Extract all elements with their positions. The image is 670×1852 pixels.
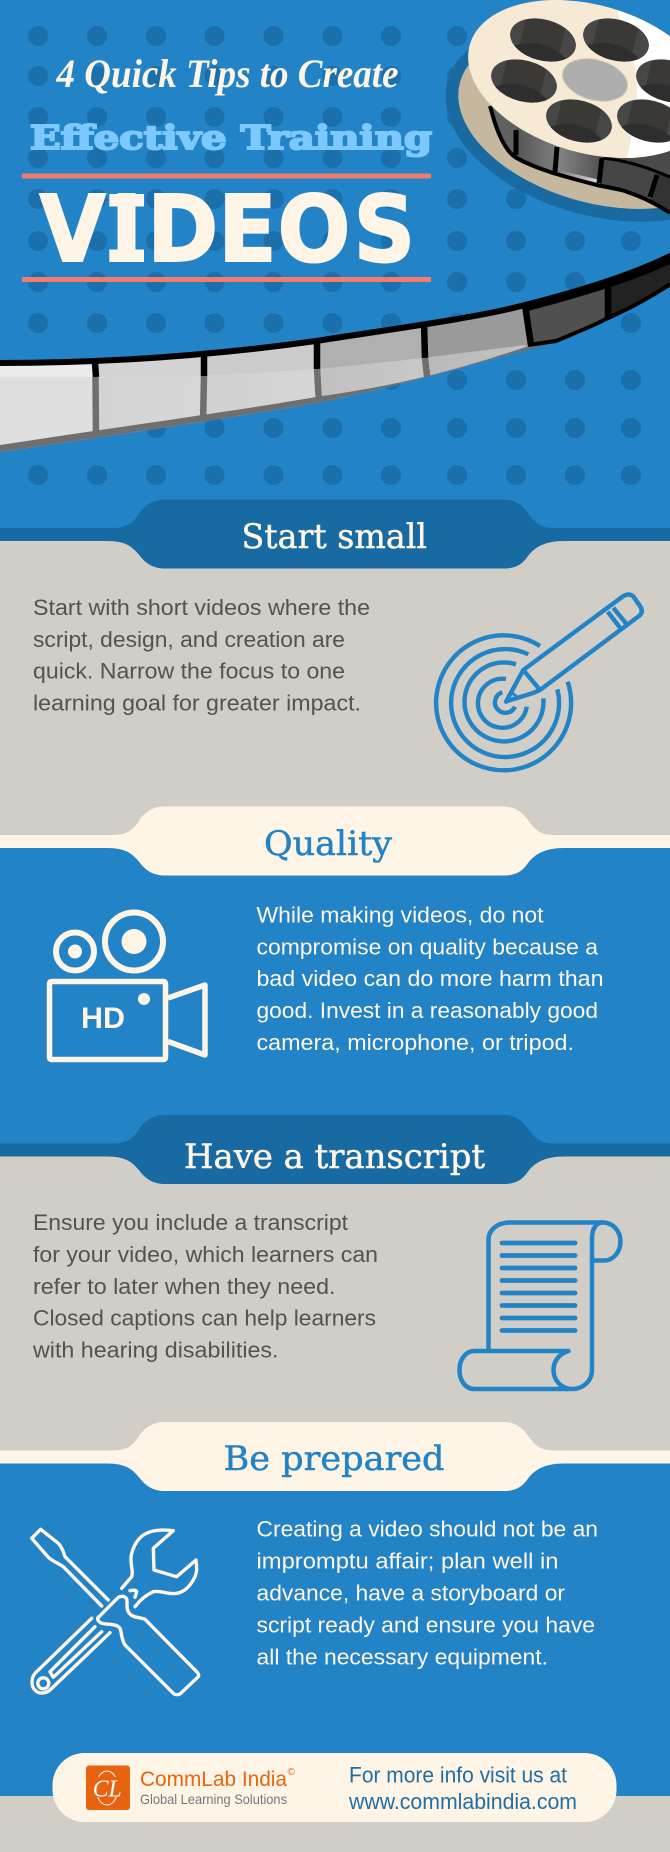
heading ribbon: have a transcript: Have a transcript — [184, 1137, 485, 1177]
reel holes — [484, 10, 670, 161]
dot pattern — [28, 26, 641, 485]
text: quality: bad video can do more harm than — [256, 966, 604, 991]
reel front disc — [468, 0, 670, 158]
footer strip — [0, 1796, 670, 1852]
reel hub — [558, 52, 632, 108]
text: have a transcript: Ensure you include a transcript — [33, 1210, 349, 1235]
panel: be prepared — [0, 1422, 670, 1798]
text: start small: Start with short videos where the — [33, 595, 370, 620]
text: quality: compromise on quality because a — [256, 934, 598, 960]
footer call to action: www.commlabindia.com — [348, 1789, 577, 1814]
text: quality — [256, 902, 604, 1055]
footer call to action: For more info visit us at — [349, 1762, 568, 1788]
title rule top — [22, 174, 431, 178]
text: have a transcript: with hearing disabilities. — [32, 1338, 279, 1362]
icon: screwdriver and wrench — [32, 1529, 199, 1695]
heading ribbon: be prepared: Be prepared — [224, 1439, 444, 1479]
film strip — [0, 253, 670, 452]
logo tagline: Global Learning Solutions — [140, 1791, 287, 1807]
text: be prepared: impromptu affair; plan well in — [256, 1548, 558, 1574]
icon: HD video camera: HD — [81, 1002, 125, 1035]
heading ribbon: be prepared — [0, 1422, 670, 1491]
logo mark: CL — [93, 1776, 122, 1802]
title VIDEOS: VIDEOS — [40, 176, 415, 283]
text: start small: quick. Narrow the focus to one — [33, 658, 345, 684]
text: be prepared: Creating a video should not be an — [256, 1516, 598, 1542]
panel: have a transcript — [0, 1115, 670, 1460]
text: quality: While making videos, do not — [256, 902, 544, 928]
text: start small: script, design, and creation are — [33, 627, 345, 652]
heading ribbon: start small — [0, 500, 670, 568]
text: be prepared: script ready and ensure you have — [256, 1612, 595, 1638]
heading ribbon: start small: Start small — [242, 517, 427, 557]
reel shadow — [423, 0, 670, 254]
footer call to action — [348, 1762, 577, 1814]
panel: start small — [0, 500, 670, 844]
film dark lower edge — [528, 284, 670, 345]
film wrapped around reel — [488, 104, 670, 215]
logo wordmark: CommLab India — [140, 1768, 287, 1791]
icon: HD video camera — [50, 912, 205, 1060]
text: have a transcript: Closed captions can help learners — [33, 1306, 376, 1330]
text: be prepared: all the necessary equipment. — [256, 1644, 548, 1670]
text: have a transcript — [32, 1210, 378, 1362]
reel back disc — [438, 2, 670, 238]
text: start small: learning goal for greater impact. — [33, 690, 361, 716]
text: be prepared: advance, have a storyboard or — [256, 1580, 566, 1606]
text: have a transcript: refer to later when they need. — [33, 1274, 336, 1299]
logo mark — [86, 1766, 130, 1810]
film reel — [446, 0, 670, 222]
film top black edge — [0, 256, 670, 363]
heading ribbon: have a transcript — [0, 1115, 670, 1184]
text: have a transcript: for your video, which learners can — [33, 1242, 378, 1267]
footer pill — [52, 1753, 616, 1822]
heading ribbon: quality — [0, 806, 670, 876]
copyright mark: © — [288, 1767, 296, 1778]
film bottom gray edge — [0, 342, 556, 452]
panel: quality — [0, 806, 670, 1152]
lighter lower film area — [270, 345, 526, 404]
text: quality: camera, microphone, or tripod. — [256, 1030, 574, 1055]
title — [22, 51, 432, 283]
title line 1: 4 Quick Tips to Create — [56, 51, 398, 96]
film thick black edge right — [521, 253, 670, 311]
heading ribbon: quality: Quality — [264, 824, 393, 864]
title rule bottom — [22, 277, 431, 282]
text: be prepared — [256, 1516, 598, 1670]
icon: scroll — [460, 1222, 620, 1389]
text: start small — [33, 595, 370, 716]
text: quality: good. Invest in a reasonably good — [256, 998, 598, 1023]
title line 2: Effective Training — [30, 118, 432, 157]
icon: target and pencil — [436, 594, 642, 770]
